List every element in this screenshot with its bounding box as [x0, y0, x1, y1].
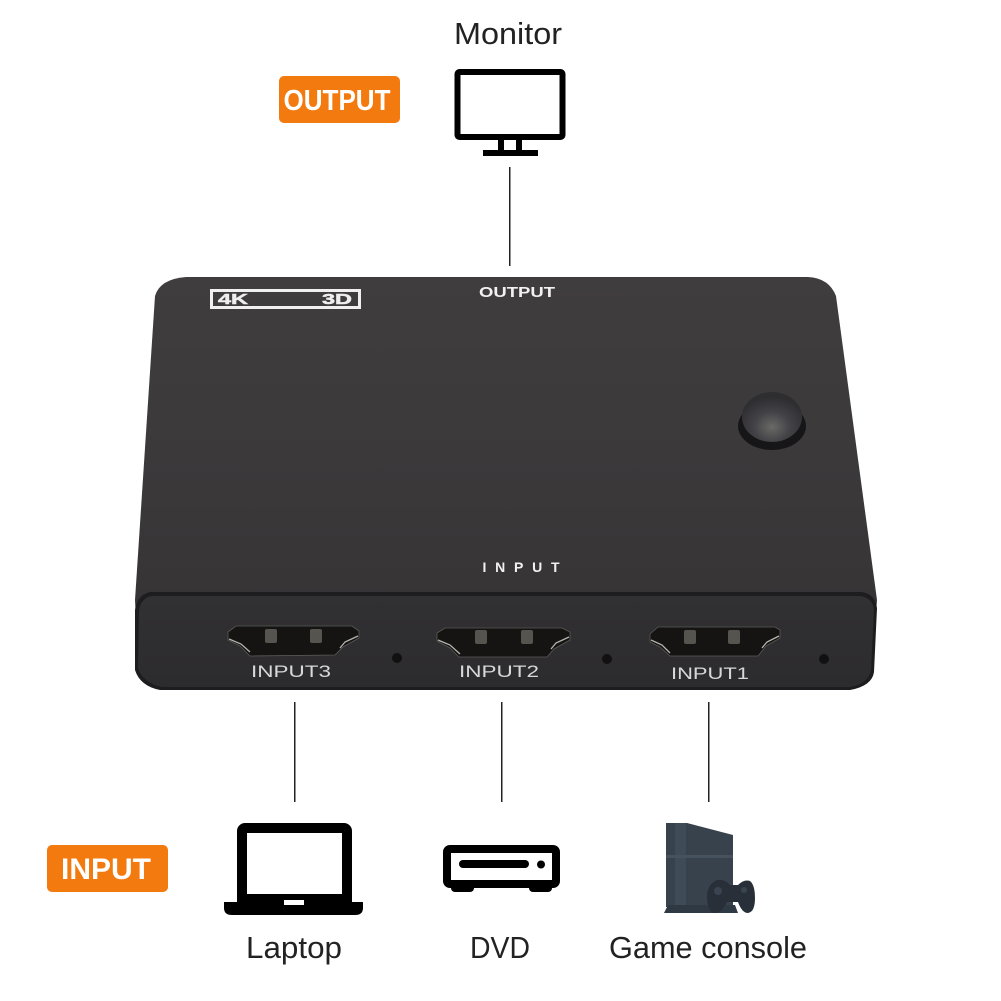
silkscreen: OUTPUT: OUTPUT [479, 284, 555, 301]
icon: DVD player [447, 849, 556, 892]
device front face [135, 592, 877, 690]
port: INPUT1 [650, 627, 780, 656]
4K 3D badge: 3D [322, 291, 352, 308]
4K 3D badge [212, 290, 360, 308]
port hole [819, 654, 829, 664]
port: INPUT3 [228, 626, 359, 656]
device: HDMI switch [135, 277, 877, 690]
label: OUTPUT badge: OUTPUT [284, 85, 391, 117]
label: INPUT badge [47, 845, 168, 892]
4K 3D badge: 4K [218, 291, 248, 308]
device top surface [135, 277, 877, 640]
label: Laptop: Laptop [246, 930, 342, 965]
label: OUTPUT badge [279, 76, 400, 123]
icon: game console [664, 823, 755, 913]
port label: INPUT1: INPUT1 [671, 664, 749, 683]
button [738, 392, 806, 450]
connector: monitor to output [509, 167, 510, 266]
silkscreen: INPUT: INPUT [482, 559, 560, 575]
icon: laptop [224, 828, 363, 915]
label: Monitor: Monitor [454, 16, 562, 51]
label: INPUT badge: INPUT [61, 853, 151, 886]
connector: input1 to game console [708, 702, 710, 802]
port hole [392, 653, 402, 663]
connector: input3 to laptop [294, 702, 296, 802]
port: INPUT2 [437, 628, 570, 657]
port hole [602, 654, 612, 664]
port label: INPUT3: INPUT3 [251, 662, 331, 681]
label: Game console: Game console [609, 930, 807, 965]
port label: INPUT2: INPUT2 [459, 662, 539, 681]
icon: monitor [458, 72, 562, 156]
connector: input2 to DVD [501, 702, 502, 802]
label: DVD: DVD [470, 930, 530, 965]
